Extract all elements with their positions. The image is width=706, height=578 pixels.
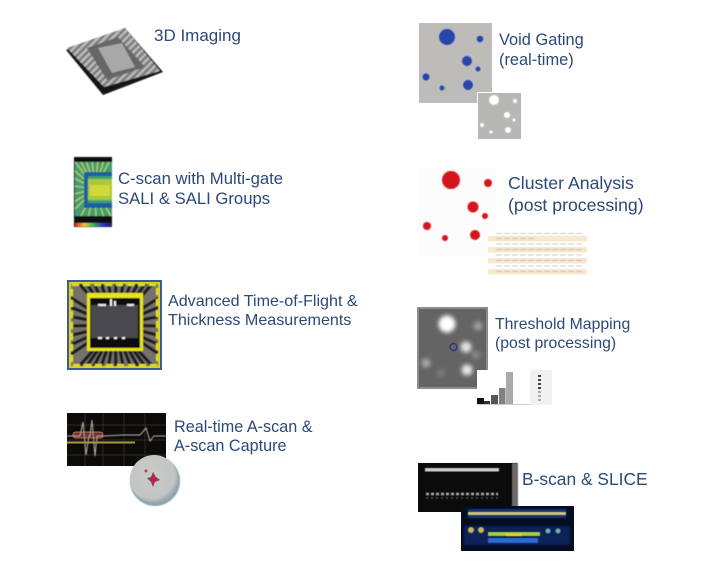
text: Threshold Mapping: Threshold Mapping	[495, 316, 630, 333]
text: post processing: (post processing)	[495, 335, 616, 352]
icon: A-scan waveform and disc	[67, 413, 180, 506]
icon: void gating images	[419, 23, 522, 140]
text: Thickness Measurements: Thickness Measurements	[168, 311, 351, 329]
icon: 3D imaging chip	[66, 28, 163, 95]
text: A-scan Capture: A-scan Capture	[174, 437, 286, 455]
text: Real-time A-scan and: Real-time A-scan &	[174, 418, 313, 436]
icon: B-scan and SLICE images	[418, 463, 574, 551]
heading: 3D Imaging: 3D Imaging	[154, 26, 241, 45]
text: real-time: (real-time)	[499, 51, 574, 69]
icon: threshold mapping image and histogram	[417, 307, 552, 405]
icon: time-of-flight map	[67, 280, 162, 370]
text: SALI and SALI Groups: SALI & SALI Groups	[118, 189, 270, 208]
icon: cluster analysis map and table	[418, 168, 587, 275]
text: post processing: (post processing)	[508, 195, 644, 215]
text: Cluster Analysis: Cluster Analysis	[508, 173, 634, 193]
icon: C-scan image	[74, 157, 112, 227]
text: Advanced Time-of-Flight and: Advanced Time-of-Flight &	[168, 292, 358, 310]
text: C-scan with Multi-gate: C-scan with Multi-gate	[118, 169, 283, 188]
text: Void Gating: Void Gating	[499, 31, 584, 49]
text: B-scan and SLICE: B-scan & SLICE	[522, 469, 648, 489]
